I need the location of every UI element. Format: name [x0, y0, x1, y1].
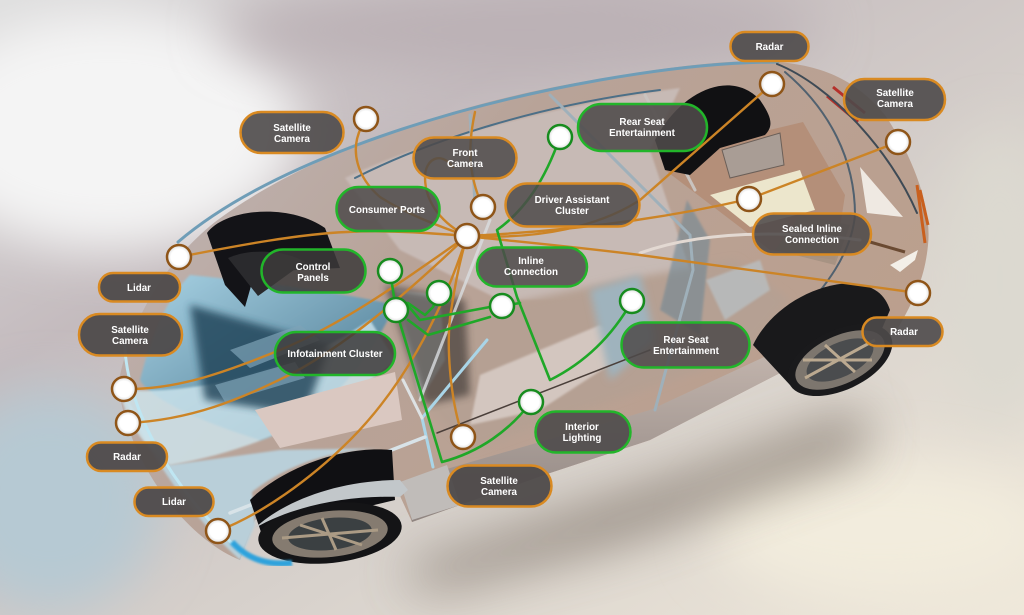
car illustration — [118, 61, 929, 570]
front fender — [255, 480, 408, 528]
callout: Infotainment Cluster: Infotainment Cluster — [287, 349, 383, 360]
green connector nodes — [378, 125, 644, 414]
callout: Inline Connection: Inline — [518, 256, 544, 267]
callout: Radar left: Radar — [113, 452, 141, 463]
callout: Driver Assistant Cluster: Driver Assistant — [535, 195, 610, 206]
callout: Consumer Ports: Consumer Ports — [349, 205, 426, 216]
upper front tyre — [207, 212, 340, 307]
callout: Infotainment Cluster — [275, 332, 395, 375]
callout: Control Panels — [262, 250, 366, 292]
callout: Radar right: Radar — [890, 327, 918, 338]
callout: Satellite Camera left top: Camera — [274, 134, 311, 145]
sill panel — [402, 345, 790, 522]
callout: Satellite Camera left top — [240, 112, 344, 153]
callout: Interior Lighting — [536, 412, 630, 452]
rear cargo — [660, 122, 903, 335]
callout: Satellite Camera left — [79, 314, 182, 356]
callout: Radar right — [862, 318, 942, 346]
callout: Sealed Inline Connection: Connection — [785, 235, 839, 246]
callout: Inline Connection: Connection — [504, 267, 558, 278]
callout: Lidar upper: Lidar — [127, 283, 151, 294]
roof glass — [345, 88, 700, 300]
dash engine cluster — [385, 285, 470, 405]
callout: Rear Seat Entertainment top: Rear Seat — [619, 117, 665, 128]
callout: Radar top — [730, 32, 808, 61]
orange connector lines — [124, 84, 918, 531]
callout: Satellite Camera left: Camera — [112, 336, 149, 347]
callout: Rear Seat Entertainment lower: Rear Seat — [663, 335, 709, 346]
callout: Sealed Inline Connection — [753, 214, 871, 254]
orange connector nodes — [112, 72, 930, 543]
callout: Front Camera: Camera — [447, 159, 484, 170]
callout: Satellite Camera bottom — [448, 466, 552, 506]
red and orange markers — [827, 87, 865, 122]
callout: Inline Connection — [477, 248, 587, 286]
callout: Interior Lighting: Lighting — [563, 433, 601, 444]
callout: Control Panels: Control — [296, 262, 331, 273]
rear wheel — [753, 283, 903, 411]
callout: Front Camera: Front — [452, 148, 478, 159]
callout: Interior Lighting: Interior — [565, 422, 599, 433]
callout: Sealed Inline Connection: Sealed Inline — [782, 224, 842, 235]
callout: Rear Seat Entertainment top: Entertainment — [609, 128, 676, 139]
callout: Satellite Camera left top: Satellite — [273, 123, 311, 134]
front nose glass — [124, 395, 392, 560]
callout: Satellite Camera top right: Satellite — [876, 88, 914, 99]
callout: Satellite Camera bottom: Camera — [481, 487, 518, 498]
car body — [118, 61, 929, 560]
callout: Lidar upper — [99, 273, 180, 302]
upper rear tyre — [655, 85, 770, 175]
callout: Radar top: Radar — [756, 42, 784, 53]
callout: Lidar lower: Lidar — [162, 497, 186, 508]
callout: Front Camera — [414, 138, 516, 178]
front wheel — [250, 449, 405, 570]
rear tail fitting — [870, 242, 905, 252]
callout: Satellite Camera top right: Camera — [877, 99, 914, 110]
cabin floor — [415, 260, 790, 450]
callout: Satellite Camera left: Satellite — [111, 325, 149, 336]
callout: Lidar lower — [134, 488, 214, 516]
callout: Consumer Ports — [336, 187, 440, 231]
callout: Rear Seat Entertainment lower: Entertainment — [653, 346, 720, 357]
windshield blue glass — [140, 275, 395, 440]
callout: Satellite Camera bottom: Satellite — [480, 476, 518, 487]
callout: Rear Seat Entertainment lower — [622, 322, 750, 368]
structural pillars — [125, 62, 917, 555]
callout: Driver Assistant Cluster — [506, 184, 640, 226]
callout: Radar left — [87, 442, 167, 471]
callout: Driver Assistant Cluster: Cluster — [555, 206, 589, 217]
callout: Control Panels: Panels — [297, 273, 329, 284]
callout: Satellite Camera top right — [844, 79, 945, 120]
callout: Rear Seat Entertainment top — [578, 104, 707, 151]
green connector lines — [390, 137, 632, 462]
